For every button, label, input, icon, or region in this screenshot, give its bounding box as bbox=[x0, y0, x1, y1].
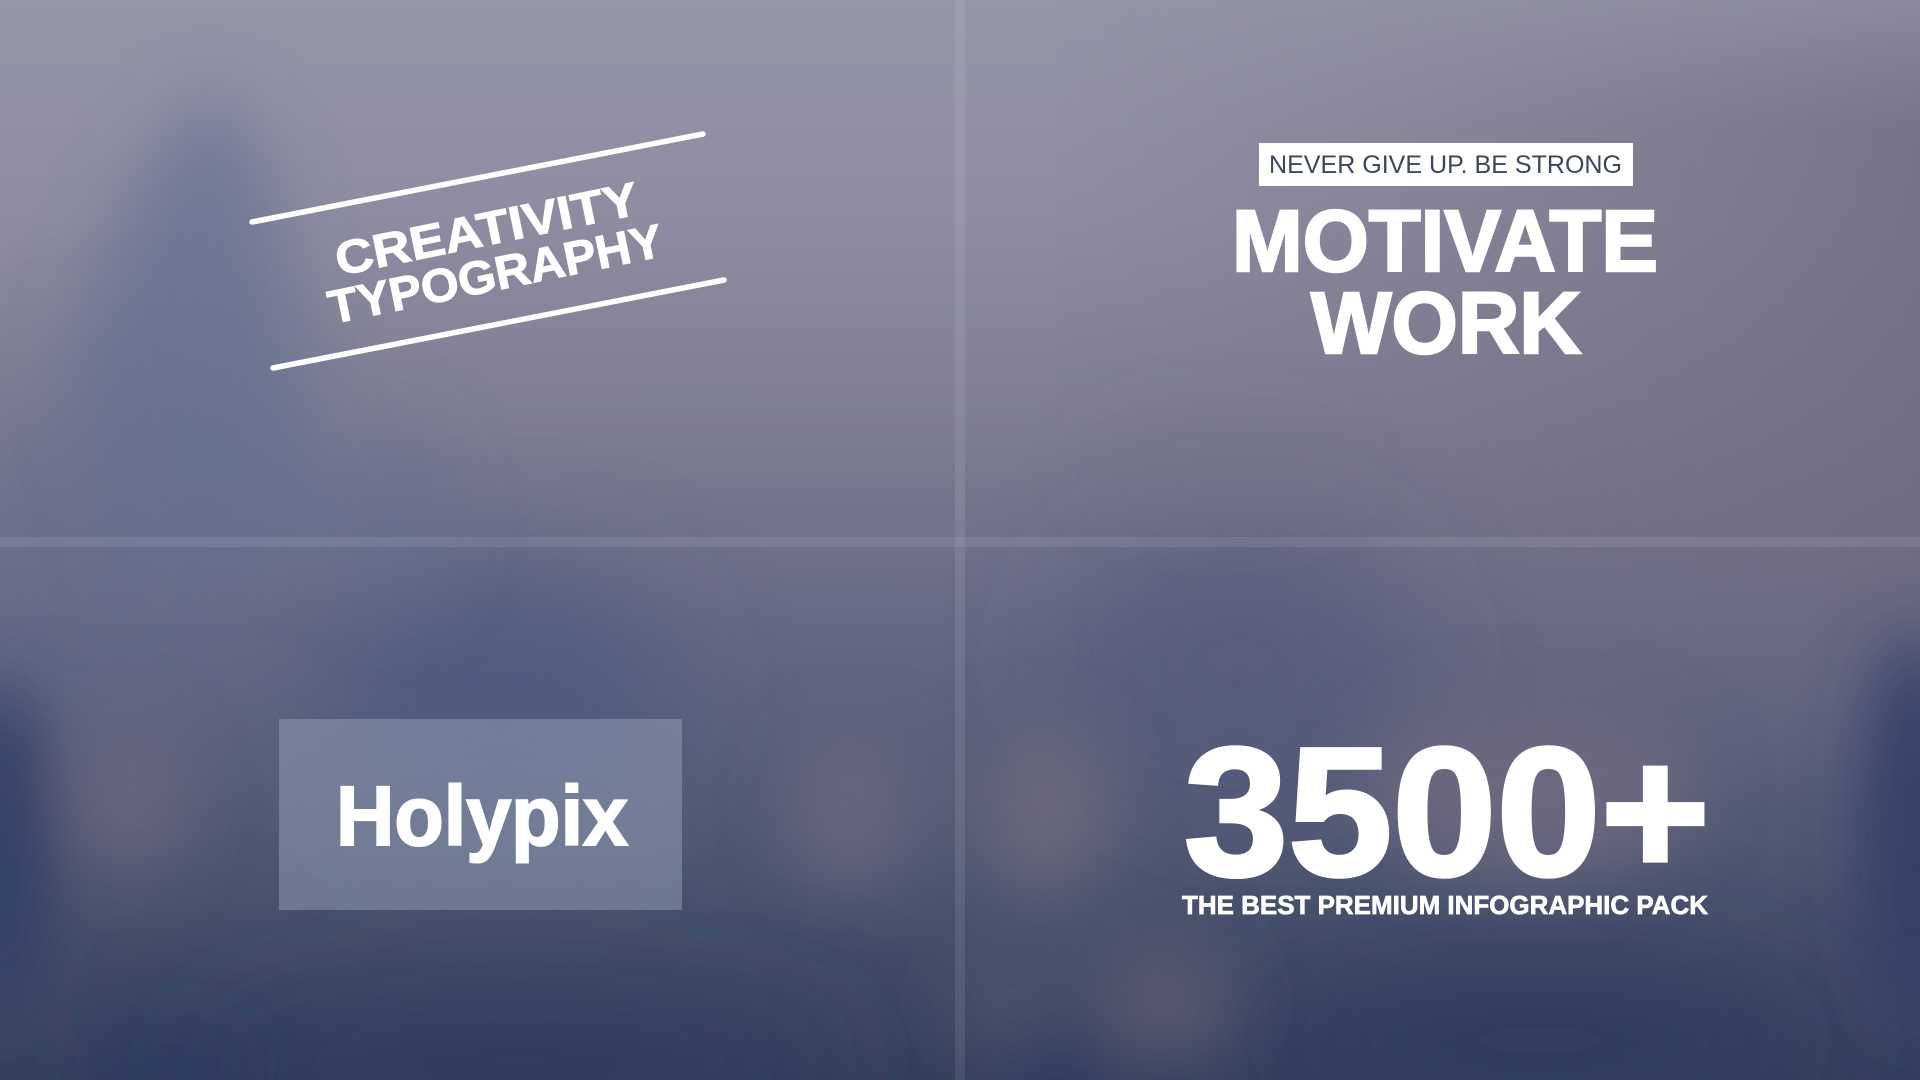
heading: work: WORK bbox=[1311, 275, 1581, 372]
heading: creativity: CREATIVITY bbox=[330, 172, 643, 285]
statistic caption: THE BEST PREMIUM INFOGRAPHIC PACK bbox=[1182, 890, 1708, 920]
big number: 3500+ bbox=[1184, 709, 1710, 914]
logo box bbox=[279, 719, 682, 910]
panel: motivate work bbox=[1232, 143, 1658, 372]
top slanted line bbox=[252, 134, 703, 222]
vertical divider bbox=[955, 0, 965, 1080]
panel: holypix logo bbox=[279, 719, 682, 910]
heading: typography: TYPOGRAPHY bbox=[323, 214, 667, 334]
tagline box bbox=[1259, 143, 1633, 186]
horizontal divider bbox=[0, 537, 1920, 547]
tagline text: NEVER GIVE UP. BE STRONG bbox=[1269, 151, 1622, 179]
panel: 3500+ statistic bbox=[1182, 709, 1710, 920]
panel: creativity typography bbox=[252, 134, 724, 368]
bottom slanted line bbox=[273, 280, 724, 368]
logo text: Holypix bbox=[336, 769, 628, 863]
heading: motivate: MOTIVATE bbox=[1232, 193, 1658, 290]
